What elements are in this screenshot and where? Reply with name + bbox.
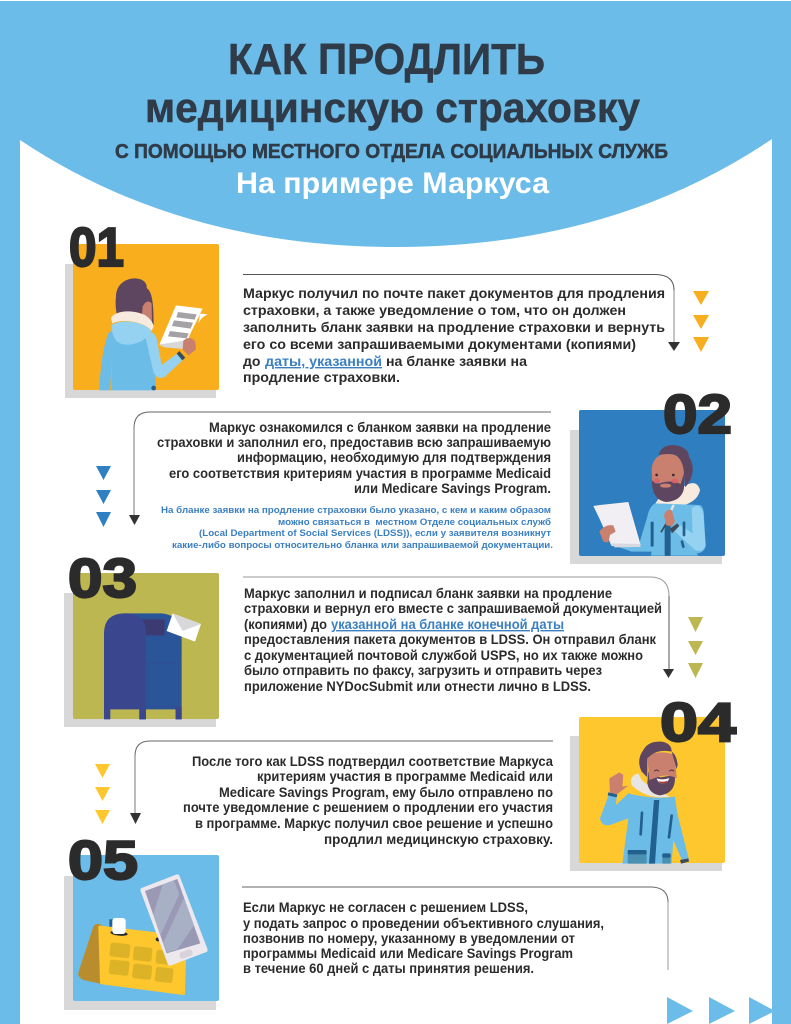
arrows: yellow triangles — [95, 764, 110, 824]
arrows: blue triangles pointing right — [667, 997, 775, 1024]
connector arrow 2 — [129, 412, 551, 525]
panel: step 04 illustration — [570, 691, 736, 871]
text block: step 05: позвонив по номеру, указанному в уведомлении от — [243, 930, 575, 946]
connector arrow 3 — [243, 577, 674, 678]
text block: step 05: у подать запрос о проведении объективного слушания, — [243, 915, 604, 931]
text block: step 05: в течение 60 дней с даты принятия решения. — [243, 960, 534, 976]
note: contact information: (Local Department of Social Services (LDSS)), если у заявителя возникнут — [199, 527, 551, 538]
text block: step 02: информацию, необходимую для подтверждения — [237, 449, 551, 465]
subtitle: С ПОМОЩЬЮ МЕСТНОГО ОТДЕЛА СОЦИАЛЬНЫХ СЛУЖБ — [115, 141, 668, 163]
arrows: olive triangles — [688, 617, 703, 678]
text block: step 02: страховки и заполнил его, предоставив всю запрашиваемую — [157, 434, 551, 450]
panel: step 01 illustration — [65, 216, 219, 398]
note: contact information: какие-либо вопросы относительно бланка или запрашиваемой документации. — [172, 539, 553, 550]
icon: man waving — [600, 742, 689, 864]
text block: step 01: заполнить бланк заявки на продление страховки и вернуть — [243, 319, 665, 335]
text block: step 03: приложение NYDocSubmit или отнести лично в LDSS. — [244, 678, 591, 694]
icon: man filling form — [593, 445, 706, 556]
header — [115, 35, 668, 200]
text block: step 04: критериям участия в программе Medicaid или — [257, 768, 553, 784]
text block: step 05: Если Маркус не согласен с решением LDSS, — [243, 899, 528, 915]
example heading: На примере Маркуса — [236, 167, 549, 200]
note: contact information: можно связаться в местном Отделе социальных служб — [278, 516, 551, 527]
text block: step 03: Маркус заполнил и подписал бланк заявки на продление — [244, 585, 612, 601]
text block: step 03: (копиями) до — [244, 616, 327, 632]
icon: person reading letter — [99, 278, 208, 390]
title line 1: КАК ПРОДЛИТЬ — [228, 35, 545, 84]
step number 01: 01 — [69, 216, 124, 278]
step number 03: 03 — [68, 547, 137, 609]
panel: step 05 illustration — [64, 829, 219, 1010]
text block: step 04: Medicare Savings Program, ему было отправлено по — [219, 784, 553, 800]
arrows: orange triangles — [693, 291, 709, 352]
text block: step 02 — [157, 419, 551, 496]
link: deadline: указанной на бланке конечной даты — [331, 616, 564, 632]
text block: step 01: до — [243, 353, 260, 369]
text block: step 04: в программе. Маркус получил свое решение и успешно — [195, 815, 553, 831]
text block: step 04: продлил медицинскую страховку. — [324, 831, 553, 847]
panel: step 03 illustration — [64, 547, 219, 727]
step number 05: 05 — [68, 829, 138, 891]
connector line 5 — [242, 887, 668, 970]
connector arrow 4 — [130, 741, 553, 824]
text block: step 04: почте уведомление с решением о продлении его участия — [183, 799, 553, 815]
step number 02: 02 — [663, 383, 732, 445]
text block: step 05: программы Medicaid или Medicare Savings Program — [243, 945, 573, 961]
text block: step 04: После того как LDSS подтвердил соответствие Маркуса — [192, 753, 553, 769]
text block: step 02: или Medicare Savings Program. — [354, 480, 551, 496]
icon: mailbox with envelope — [104, 613, 201, 719]
step number 04: 04 — [660, 691, 736, 753]
title line 2: медицинскую страховку — [145, 84, 641, 131]
text block: step 03: страховки и вернул его вместе с запрашиваемой документацией — [244, 600, 662, 616]
panel: step 02 illustration — [570, 383, 732, 564]
text block: step 02: Маркус ознакомился с бланком заявки на продление — [209, 419, 551, 435]
note: contact information — [161, 504, 553, 550]
text block: step 01: Маркус получил по почте пакет документов для продления — [243, 285, 665, 301]
text block: step 01: его со всеми запрашиваемыми документами (копиями) — [243, 336, 636, 352]
text block: step 01: продление страховки. — [243, 369, 400, 385]
text block: step 01: страховки, а также уведомление о том, что он должен — [243, 302, 626, 318]
arrows: blue triangles — [96, 466, 111, 527]
note: contact information: На бланке заявки на продление страховки было указано, с кем и каким образом — [161, 504, 551, 515]
text block: step 01: на бланке заявки на — [386, 353, 527, 369]
text block: step 01 — [243, 285, 665, 385]
text block: step 03: было отправить по факсу, загрузить и отправить через — [244, 662, 602, 678]
text block: step 03: предоставления пакета документов в LDSS. Он отправил бланк — [244, 631, 657, 647]
connector arrow 1 — [243, 274, 680, 351]
icon: calendar and phone — [78, 877, 205, 993]
link: date: даты, указанной — [265, 353, 382, 369]
text block: step 04 — [183, 753, 553, 847]
text block: step 03 — [244, 585, 662, 694]
text block: step 02: его соответствия критериям участия в программе Medicaid — [169, 465, 551, 481]
text block: step 03: с документацией почтовой службой USPS, но их также можно — [244, 647, 643, 663]
text block: step 05 — [243, 899, 604, 976]
